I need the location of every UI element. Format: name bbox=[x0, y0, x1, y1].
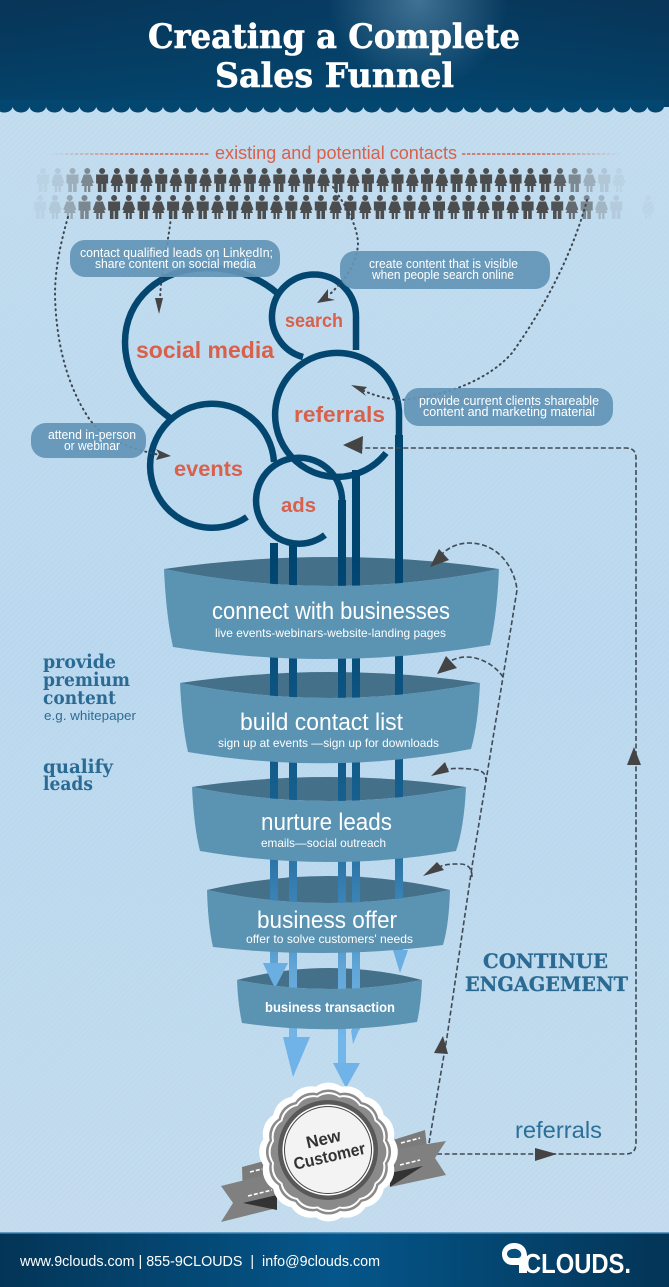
funnel stage: business transaction: business transaction bbox=[265, 1000, 395, 1015]
people row 1 bbox=[37, 168, 626, 192]
circles: social media, search, referrals, events, ads bbox=[125, 268, 399, 544]
side note: provide premium content: provide bbox=[43, 651, 116, 673]
callout: social media bbox=[70, 240, 280, 277]
funnel stage: nurture leads bbox=[192, 787, 466, 862]
ribbon bbox=[221, 1130, 446, 1222]
callout: search: create content that is visible bbox=[369, 257, 518, 271]
dotted connectors from contacts to channels bbox=[55, 187, 587, 460]
label: continue engagement: ENGAGEMENT bbox=[465, 972, 628, 996]
funnel stage: build contact list: sign up at events —sign up for downloads bbox=[218, 736, 439, 750]
circle labels: search bbox=[285, 311, 343, 332]
side note: provide premium content: content bbox=[43, 687, 116, 709]
title: Creating a Complete bbox=[148, 17, 520, 57]
callout: referrals: content and marketing material bbox=[423, 405, 595, 419]
callout: social media: share content on social media bbox=[95, 257, 256, 271]
funnel stage: connect with businesses: connect with businesses bbox=[212, 598, 450, 625]
funnel stage: nurture leads: emails—social outreach bbox=[261, 836, 386, 850]
callout: search bbox=[340, 251, 550, 289]
callout: events: attend in-person bbox=[48, 428, 136, 442]
dashed loop: continue engagement bbox=[423, 543, 517, 1143]
funnel pipes and arrows bbox=[263, 435, 408, 1088]
funnel stage: business offer bbox=[207, 890, 450, 953]
side note: provide premium content bbox=[43, 651, 136, 723]
label: continue engagement: CONTINUE bbox=[483, 949, 608, 973]
callout: events: or webinar bbox=[64, 439, 120, 453]
funnel stage: business offer: offer to solve customers' needs bbox=[246, 932, 413, 946]
label: referrals: referrals bbox=[515, 1117, 602, 1143]
logo: 9clouds bbox=[502, 1243, 631, 1279]
funnel rims bbox=[164, 557, 499, 989]
side note: qualify leads: leads bbox=[43, 773, 93, 795]
funnel stage: build contact list: build contact list bbox=[240, 709, 403, 736]
circle labels: ads bbox=[281, 495, 316, 517]
callout: referrals bbox=[404, 388, 613, 426]
people row 2 bbox=[34, 195, 654, 219]
callout: social media: contact qualified leads on LinkedIn; bbox=[80, 246, 273, 260]
title: Sales Funnel bbox=[215, 56, 454, 96]
funnel stage: build contact list bbox=[180, 683, 480, 763]
side note: qualify leads: qualify bbox=[43, 756, 114, 778]
heading: existing and potential contacts: existing and potential contacts bbox=[215, 143, 457, 163]
badge: new customer bbox=[248, 1072, 409, 1232]
arrow tip over business transaction rim bbox=[263, 963, 288, 988]
header banner bbox=[0, 0, 669, 113]
funnel stage: connect with businesses: live events-webinars-website-landing pages bbox=[215, 626, 446, 640]
dashed loop: referrals bbox=[343, 436, 641, 1161]
logo: 9clouds: CLOUDS. bbox=[524, 1248, 631, 1279]
label: continue engagement bbox=[465, 949, 628, 996]
callout: search: when people search online bbox=[371, 268, 514, 282]
footer contact text: www.9clouds.com | 855-9CLOUDS | info@9clouds.com bbox=[19, 1253, 380, 1270]
callout: referrals: provide current clients shareable bbox=[419, 394, 599, 408]
funnel stage: connect with businesses bbox=[164, 569, 499, 659]
callout: events bbox=[31, 423, 146, 458]
side note: qualify leads bbox=[43, 756, 114, 795]
badge: new customer: New bbox=[304, 1126, 343, 1152]
badge: new customer: Customer bbox=[292, 1139, 367, 1174]
funnel stage: nurture leads: nurture leads bbox=[261, 809, 392, 836]
circle labels: events bbox=[174, 458, 243, 481]
circle labels: social media bbox=[136, 337, 274, 363]
side note: provide premium content: premium bbox=[43, 669, 130, 691]
title bbox=[148, 17, 520, 96]
funnel stage: business offer: business offer bbox=[257, 907, 397, 934]
side note: provide premium content: e.g. whitepaper bbox=[44, 709, 136, 723]
circle labels: referrals bbox=[294, 402, 385, 427]
funnel stage: business transaction bbox=[237, 980, 422, 1029]
footer bar bbox=[0, 1232, 669, 1287]
circle labels bbox=[136, 311, 385, 517]
